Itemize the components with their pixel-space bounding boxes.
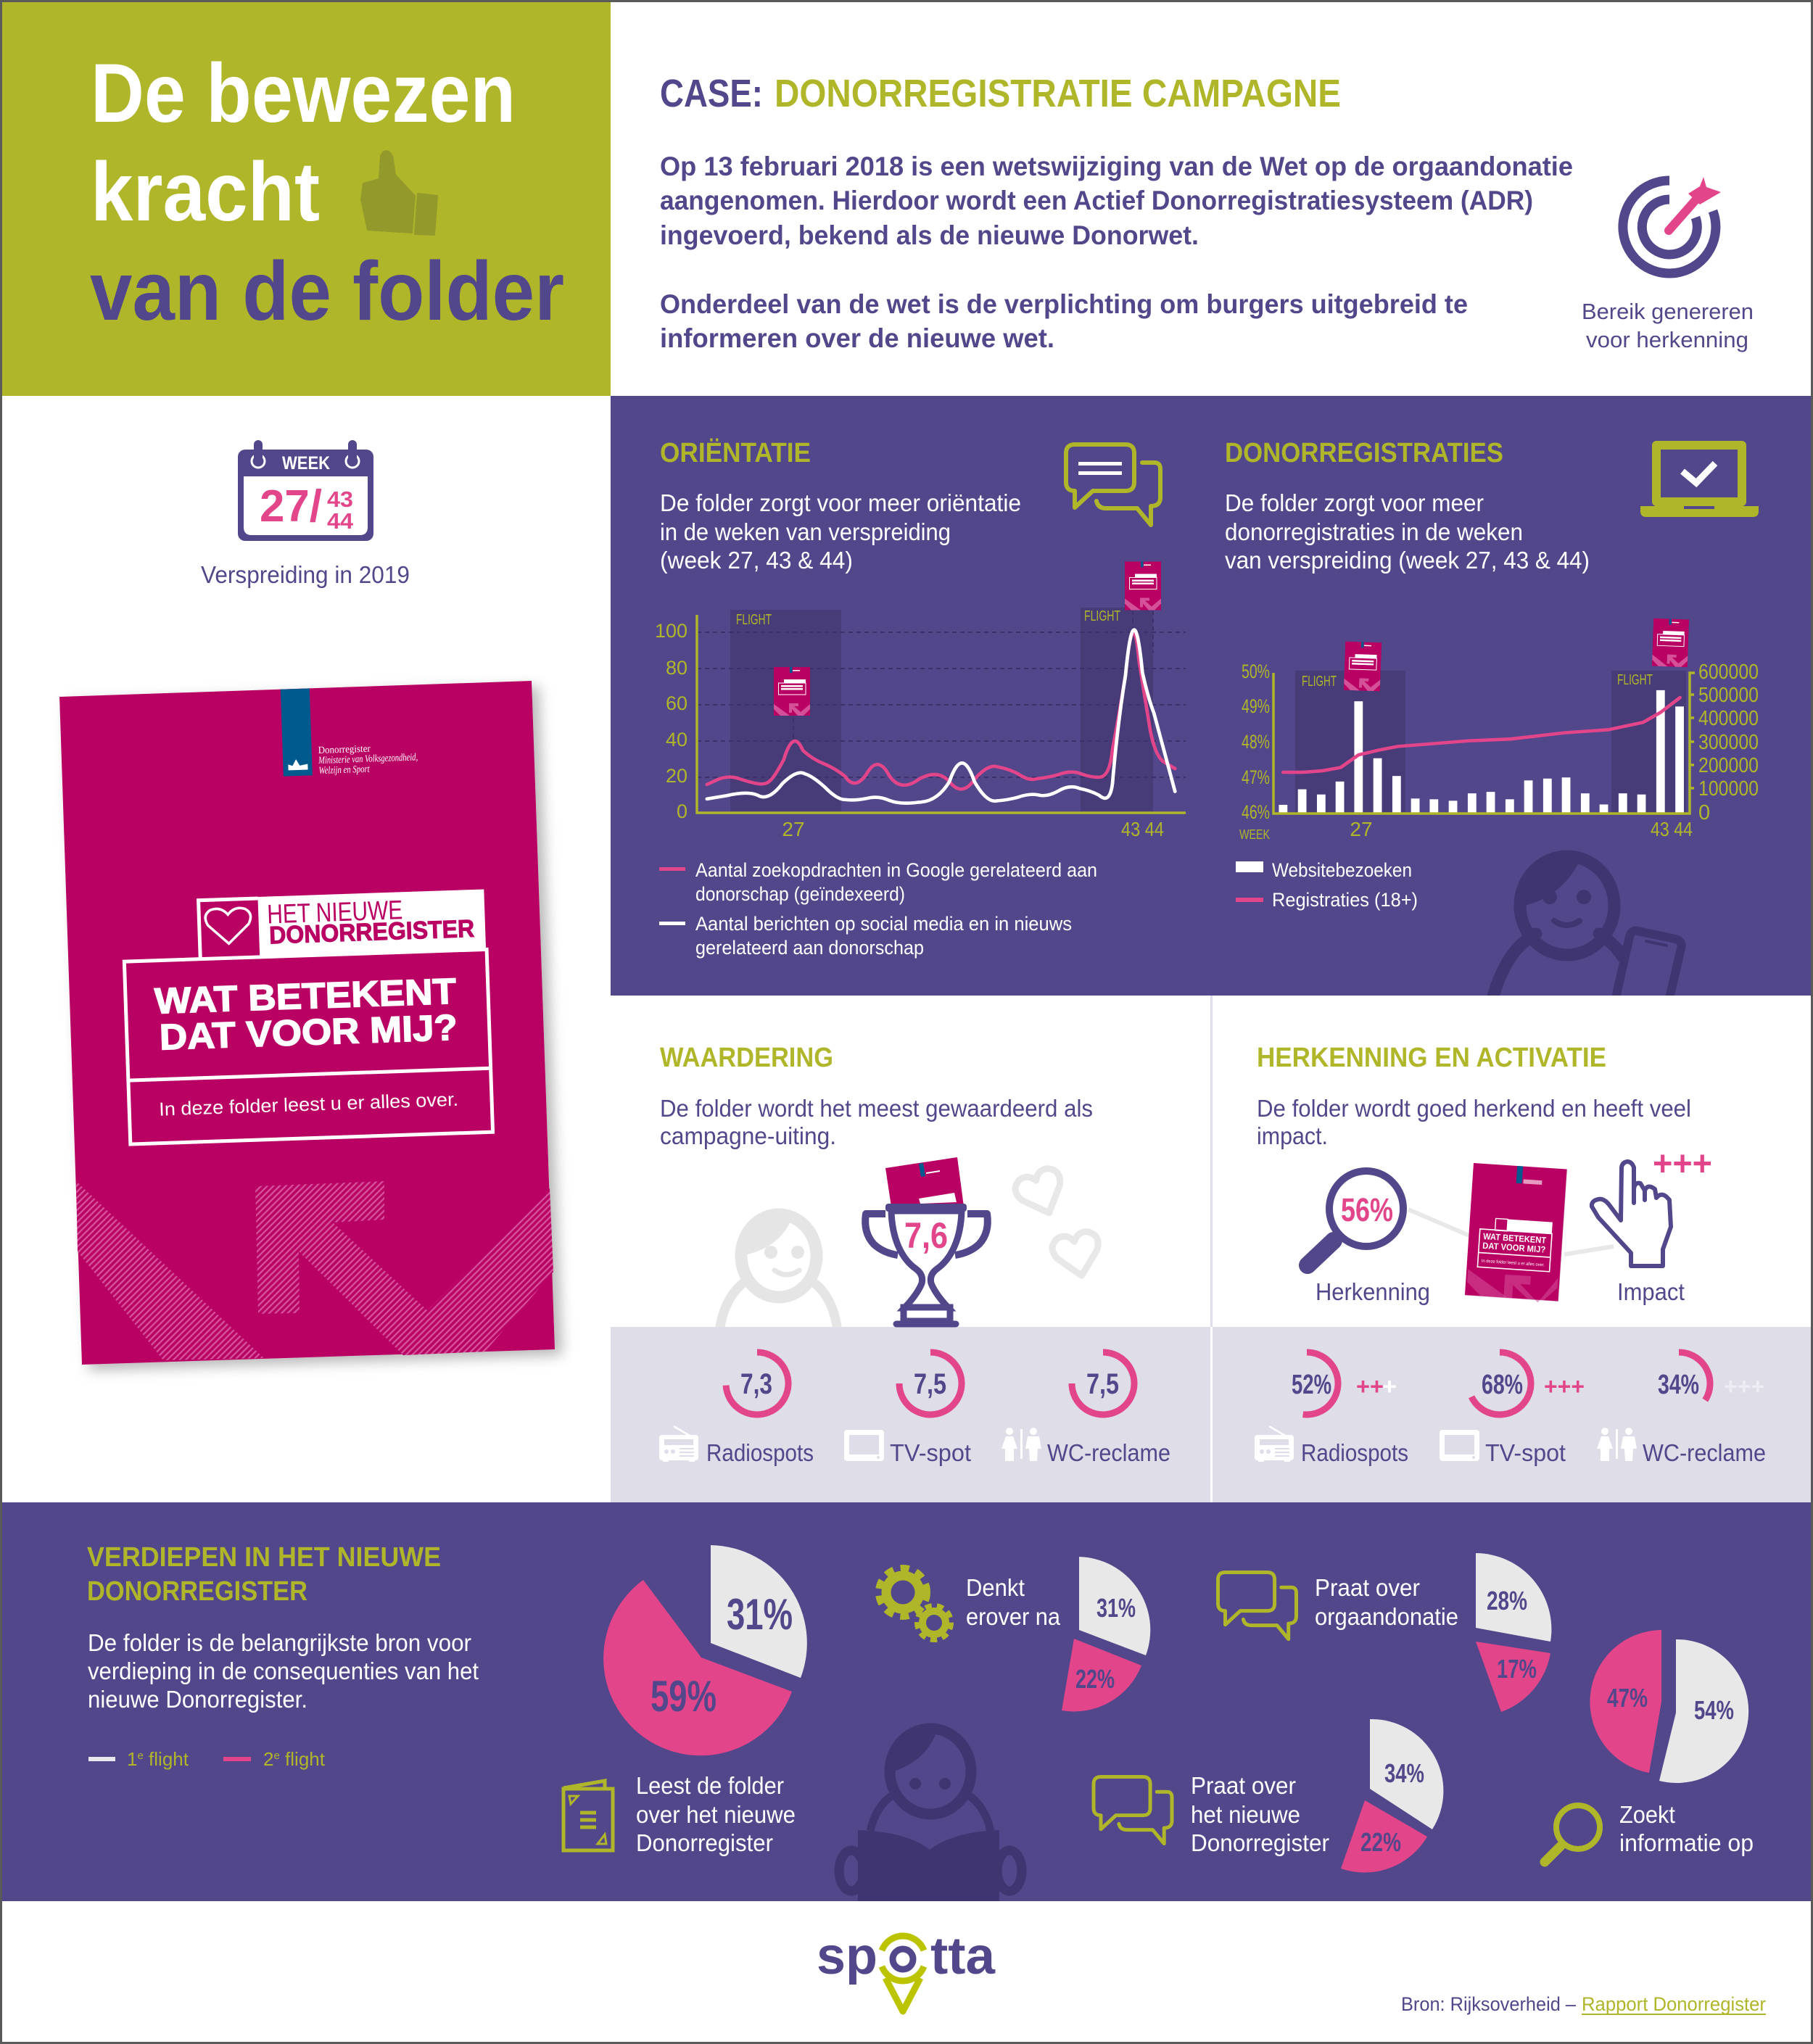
icon: trophy with folder: 7,6 [904,1215,948,1256]
icon: tv [1440,1430,1479,1461]
case paragraph 2: Onderdeel van de wet is de verplichting om burgers uitgebreid te [660,289,1468,319]
orientatie text: De folder zorgt voor meer oriëntatie [660,489,1021,516]
pie: praat over het nieuwe donorregister: 22% [1360,1827,1401,1857]
combo chart: donorregistraties [1239,618,1759,842]
legend: orientatie: Aantal berichten op social media en in nieuws [695,913,1072,935]
verdiepen heading: DONORREGISTER [87,1576,307,1607]
title line 1: De bewezen [91,47,516,140]
spotta logo [817,1927,996,2011]
icon: calendar [238,440,373,541]
label: zoekt informatie op: informatie op [1619,1829,1754,1856]
label: zoekt informatie op: Zoekt [1619,1801,1675,1828]
panel: herkenning en activatie [1210,996,1811,1502]
line chart: orientatie: 20 [666,765,687,787]
legend: flights: flight [280,1748,326,1770]
legend: flights: e [273,1750,280,1762]
herkenning text: impact. [1257,1122,1328,1149]
icon: person reading [839,1729,1022,1901]
label: radiospots: Radiospots [1301,1439,1408,1466]
source line: Rapport Donorregister [1582,1993,1766,2015]
combo chart: donorregistraties: FLIGHT [1302,674,1337,690]
line chart: orientatie: 40 [666,729,687,750]
line chart: orientatie: 27 [782,818,805,840]
folder cover: WAT BETEKENT [154,971,457,1022]
ring: wc-reclame 34% [1648,1352,1764,1415]
line chart: orientatie: 43 44 [1121,818,1164,840]
connector lines [1408,1209,1614,1254]
verdiepen heading: VERDIEPEN IN HET NIEUWE [87,1542,441,1573]
pie: denkt erover na: 31% [1097,1593,1136,1623]
label: radiospots: Radiospots [706,1439,814,1466]
line chart: orientatie: 80 [666,657,687,679]
icon: radio [1255,1426,1294,1462]
spotta logo: sp [817,1927,877,1985]
folder cover [59,681,555,1365]
pie: leest de folder: 31% [727,1590,793,1639]
label: impact: Impact [1617,1278,1685,1305]
combo chart: donorregistraties: 27 [1350,818,1373,840]
verdiepen text: verdieping in de consequenties van het [88,1658,479,1684]
label: denkt erover na: erover na [966,1603,1061,1630]
target caption: Bereik genereren [1582,299,1754,324]
legend: flights: flight [144,1748,189,1770]
icon: magnifier [1545,1805,1600,1862]
target caption: voor herkenning [1586,327,1748,352]
legend: orientatie: donorschap (geïndexeerd) [695,883,905,905]
panel: verdiepen [2,1502,1811,1901]
label: leest de folder [636,1772,796,1856]
ring: radiospots 7,3: 7,3 [740,1368,772,1400]
verdiepen text [88,1629,479,1713]
target caption [1582,299,1754,352]
ring: tv-spot 7,5 [899,1352,962,1415]
case heading: CASE: [660,72,763,115]
legend: orientatie: gerelateerd aan donorschap [695,937,924,959]
combo chart: donorregistraties: 43 44 [1651,818,1693,840]
legend: donorregistraties: Registraties (18+) [1272,889,1418,911]
title line 2: kracht [91,146,320,239]
pie: zoekt informatie op: 54% [1694,1695,1734,1725]
combo chart: donorregistraties: FLIGHT [1617,672,1653,688]
case paragraph 1: aangenomen. Hierdoor wordt een Actief Donorregistratiesysteem (ADR) [660,186,1533,215]
label: zoekt informatie op [1619,1801,1754,1856]
combo chart: donorregistraties: 49% [1242,695,1270,717]
icon: hearts [1012,1165,1104,1280]
orientatie text [660,489,1021,574]
panel: purple charts [611,396,1811,1004]
label: wc-reclame: WC-reclame [1643,1439,1766,1466]
orientatie heading: ORIËNTATIE [660,437,811,468]
legend: donorregistraties: Websitebezoeken [1272,859,1412,881]
label: tv-spot: TV-spot [1485,1439,1566,1466]
ring: tv-spot 68% [1469,1352,1585,1415]
legend: flights: 2 [263,1748,273,1770]
ring: tv-spot 68%: +++ [1544,1373,1585,1399]
panel: footer [2,1901,1811,2042]
icon: calendar: 43 [327,487,353,512]
case paragraph 1 [660,152,1573,250]
pie: leest de folder [603,1545,807,1755]
verdiepen heading [87,1542,441,1607]
pie: zoekt informatie op [1590,1630,1748,1783]
section: donorregistraties [1225,438,1759,1004]
label: praat over orgaandonatie: orgaandonatie [1315,1603,1458,1630]
pie: praat over orgaandonatie: 28% [1487,1586,1527,1615]
icon: radio [659,1426,698,1462]
label: praat over het nieuwe donorregister: Praat over [1191,1772,1296,1799]
icon: calendar: 27/ [260,481,322,531]
legend: orientatie [659,859,1097,959]
herkenning text [1257,1095,1691,1149]
donorregistraties text [1225,489,1590,574]
line chart: orientatie [655,561,1186,840]
icon: thumbs up [361,151,437,235]
line chart: orientatie: 60 [666,692,687,714]
ring: radiospots 52%: + [1382,1373,1397,1399]
ring: wc-reclame 7,5 [1072,1352,1134,1415]
icon: laptop with check [1640,445,1759,517]
orientatie text: in de weken van verspreiding [660,518,951,545]
line chart: orientatie: FLIGHT [736,612,772,628]
ring: wc-reclame 34%: 34% [1658,1370,1699,1400]
combo chart: donorregistraties: 48% [1242,731,1270,753]
folder thumbnail: In deze folder leest u er alles over. [1482,1259,1545,1267]
pie: praat over orgaandonatie [1476,1553,1551,1712]
case paragraph 1: Op 13 februari 2018 is een wetswijziging van de Wet op de orgaandonatie [660,152,1573,181]
icon: gray person [719,1212,838,1331]
spreading caption: Verspreiding in 2019 [201,561,410,588]
icon: tv [844,1430,884,1461]
combo chart: donorregistraties: 0 [1698,801,1710,824]
donorregistraties text: De folder zorgt voor meer [1225,489,1484,516]
folder thumbnail: DAT VOOR MIJ? [1482,1241,1546,1255]
legend: orientatie: Aantal zoekopdrachten in Google gerelateerd aan [695,859,1097,881]
line chart: orientatie: 100 [655,620,687,642]
label: denkt erover na: Denkt [966,1574,1025,1601]
donorregistraties text: van verspreiding (week 27, 43 & 44) [1225,547,1590,574]
spotta logo: tta [930,1927,996,1985]
ring: tv-spot 7,5: 7,5 [914,1368,946,1400]
orientatie text: (week 27, 43 & 44) [660,547,853,574]
combo chart: donorregistraties: 100000 [1698,777,1759,800]
combo chart: donorregistraties: 400000 [1698,707,1759,730]
icon: calendar: WEEK [282,453,330,473]
label: leest de folder: over het nieuwe [636,1801,796,1828]
herkenning text: De folder wordt goed herkend en heeft veel [1257,1095,1691,1122]
label: praat over het nieuwe donorregister: Donorregister [1191,1829,1329,1856]
verdiepen text: nieuwe Donorregister. [88,1686,307,1713]
waardering heading: WAARDERING [660,1043,833,1073]
pie: leest de folder: 59% [651,1672,716,1721]
folder cover: DAT VOOR MIJ? [159,1007,458,1058]
ring: radiospots 7,3 [726,1352,788,1415]
folder thumbnail: WAT BETEKENT [1483,1231,1547,1246]
icon: toilet figures [1002,1428,1041,1461]
icon: toilet figures [1597,1428,1637,1461]
folder cover: HET NIEUWE [267,895,403,930]
pie: praat over het nieuwe donorregister: 34% [1384,1758,1424,1788]
pie: denkt erover na [1062,1557,1150,1711]
label: praat over het nieuwe donorregister: het nieuwe [1191,1801,1300,1828]
icon: trophy with folder [865,1157,988,1324]
icon: calendar: 44 [327,508,354,534]
panel: waardering [611,1047,1210,1502]
section: orientatie [655,437,1186,959]
ring: tv-spot 68%: 68% [1482,1370,1523,1400]
icon: pointing hand [1592,1162,1671,1266]
source line [1401,1993,1766,2015]
icon: magnifier 56%: 56% [1341,1191,1393,1228]
icon: speech bubbles [1218,1572,1296,1639]
combo chart: donorregistraties: 200000 [1698,754,1759,777]
combo chart: donorregistraties: WEEK [1239,827,1270,842]
folder thumbnail [1465,1163,1567,1304]
label: praat over orgaandonatie: Praat over [1315,1574,1420,1601]
ring: wc-reclame 34%: +++ [1724,1373,1764,1399]
donorregistraties heading: DONORREGISTRATIES [1225,438,1503,468]
combo chart: donorregistraties: 47% [1242,766,1270,788]
panel: spreading and folder [2,396,611,1502]
folder cover: Ministerie van Volksgezondheid, [318,752,418,766]
line chart: orientatie: FLIGHT [1084,608,1120,624]
legend: flights: 1 [127,1748,137,1770]
icon: speech bubbles [1094,1776,1172,1844]
legend: donorregistraties [1236,859,1418,911]
ring: radiospots 52% [1276,1352,1397,1415]
icon: person with phone [1491,856,1682,1004]
pie: zoekt informatie op: 47% [1607,1683,1648,1713]
label: herkenning: Herkenning [1316,1278,1430,1305]
combo chart: donorregistraties: 600000 [1698,661,1759,684]
waardering text [660,1095,1093,1149]
donorregistraties text: donorregistraties in de weken [1225,518,1523,545]
label: praat over orgaandonatie [1315,1574,1458,1630]
pie: praat over orgaandonatie: 17% [1497,1654,1537,1684]
folder cover: In deze folder leest u er alles over. [159,1088,459,1120]
ring: radiospots 52%: 52% [1292,1370,1331,1400]
label: leest de folder: Leest de folder [636,1772,784,1799]
source line: Bron: Rijksoverheid – [1401,1993,1576,2015]
label: tv-spot: TV-spot [890,1439,971,1466]
pie: praat over het nieuwe donorregister [1341,1719,1443,1872]
combo chart: donorregistraties: 500000 [1698,684,1759,707]
icon: gears [879,1568,951,1639]
ring: wc-reclame 7,5: 7,5 [1086,1368,1119,1400]
icon: magnifier 56% [1308,1171,1403,1265]
label: leest de folder: Donorregister [636,1829,773,1856]
herkenning heading: HERKENNING EN ACTIVATIE [1257,1043,1606,1073]
icon: speech bubbles [1066,444,1160,525]
title line 3: van de folder [90,245,564,338]
panel: case intro [611,2,1811,396]
combo chart: donorregistraties: 300000 [1698,731,1759,754]
folder cover: Donorregister [318,744,371,756]
case paragraph 2 [660,289,1468,353]
line chart: orientatie: 0 [677,800,687,822]
icon: folder leaflet [563,1781,613,1850]
pie: denkt erover na: 22% [1075,1664,1115,1694]
pluses: impact: +++ [1653,1145,1712,1183]
waardering text: De folder wordt het meest gewaardeerd als [660,1095,1093,1122]
case paragraph 1: ingevoerd, bekend als de nieuwe Donorwet. [660,220,1199,250]
label: wc-reclame: WC-reclame [1047,1439,1170,1466]
panel: title [2,2,611,396]
combo chart: donorregistraties: 50% [1242,661,1270,682]
combo chart: donorregistraties: 46% [1242,801,1270,823]
legend: flights: e [137,1750,144,1762]
verdiepen text: De folder is de belangrijkste bron voor [88,1629,471,1656]
folder cover: Welzijn en Sport [318,764,371,777]
folder cover: DONORREGISTER [269,915,475,949]
legend: flights [88,1748,326,1770]
case paragraph 2: informeren over de nieuwe wet. [660,323,1054,353]
label: praat over het nieuwe donorregister [1191,1772,1329,1856]
ring: radiospots 52%: ++ [1356,1373,1384,1399]
icon: target with arrow [1623,177,1721,273]
waardering text: campagne-uiting. [660,1122,836,1149]
label: denkt erover na [966,1574,1061,1630]
case heading: DONORREGISTRATIE CAMPAGNE [775,72,1341,115]
